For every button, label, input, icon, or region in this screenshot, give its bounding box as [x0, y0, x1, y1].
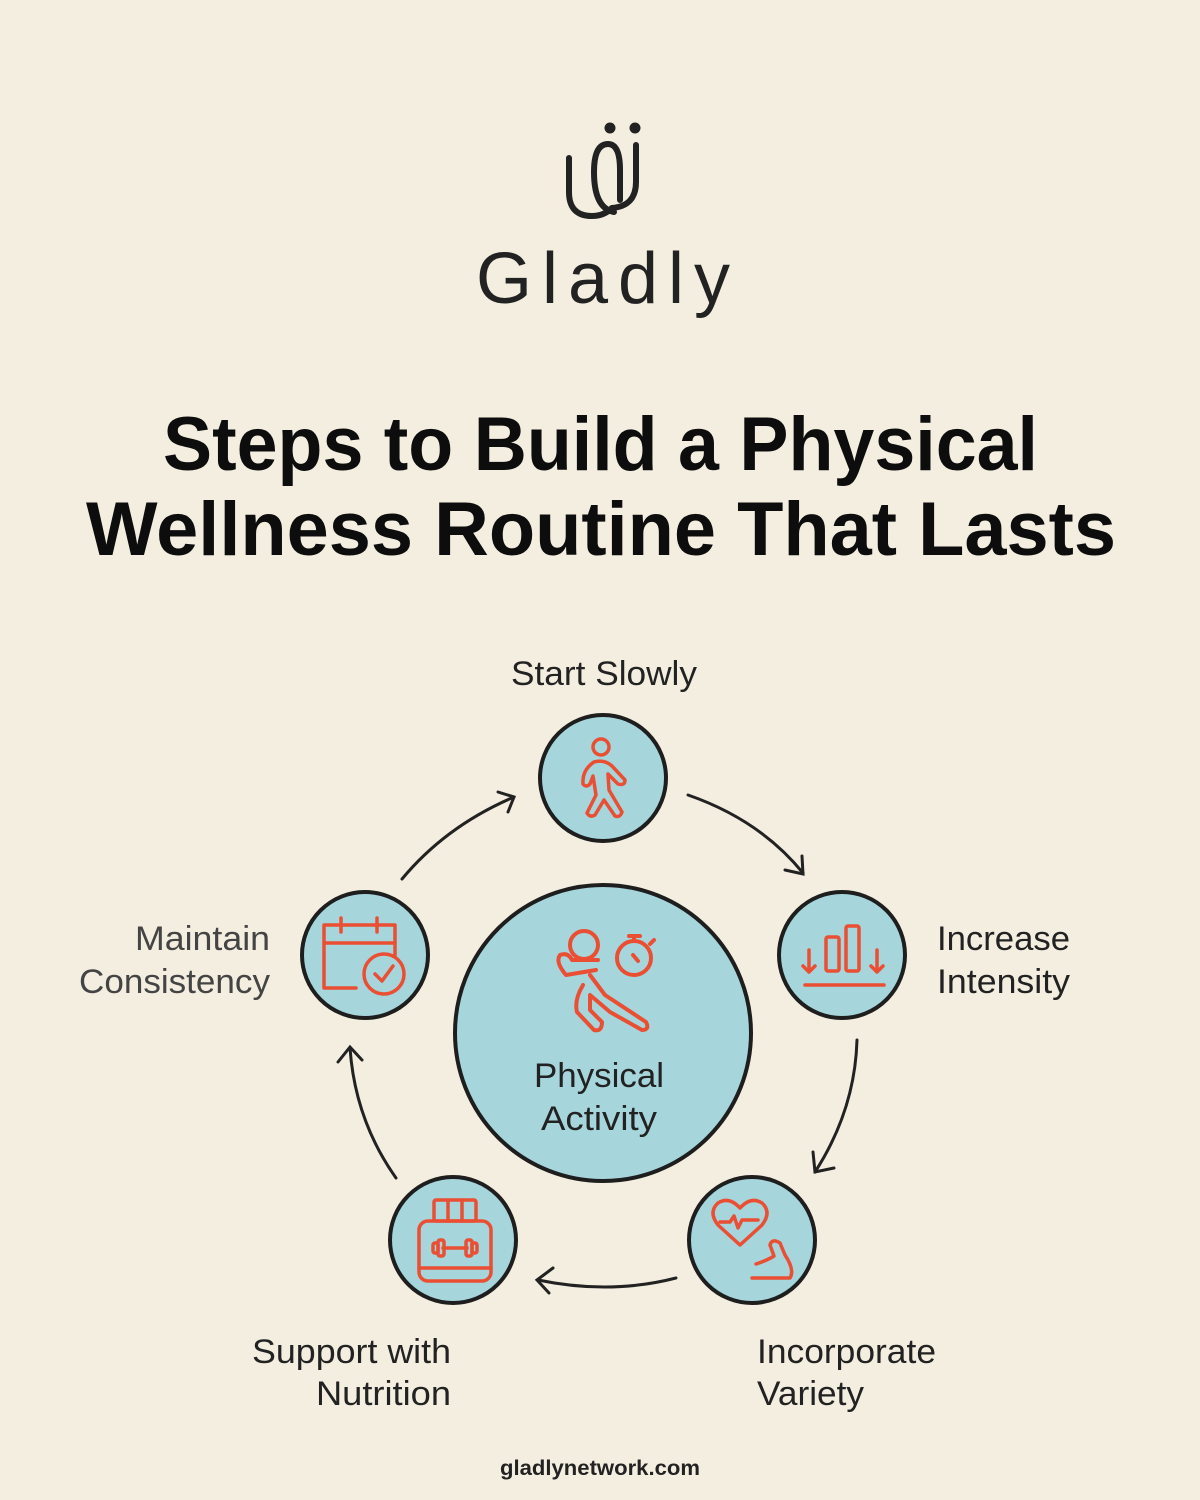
- node: support with nutrition: Nutrition: [316, 1375, 451, 1413]
- icon: runner with stopwatch: [558, 931, 654, 1030]
- logo mark: [569, 126, 638, 216]
- node: increase intensity: Increase: [937, 920, 1070, 958]
- node: maintain consistency: Consistency: [79, 963, 270, 1001]
- center label: Physical: [534, 1057, 664, 1095]
- node: increase intensity: Intensity: [937, 963, 1070, 1001]
- node: support with nutrition: Support with: [252, 1333, 451, 1371]
- node: incorporate variety: [689, 1177, 936, 1413]
- center circle: Activity: [541, 1100, 657, 1138]
- arrows: [338, 792, 857, 1293]
- node: incorporate variety: Incorporate: [757, 1333, 936, 1371]
- title: Wellness Routine That Lasts: [86, 487, 1116, 572]
- node: maintain consistency: Maintain: [135, 920, 270, 958]
- title: [86, 402, 1116, 572]
- footer url: gladlynetwork.com: [500, 1457, 700, 1480]
- node: start slowly: Start Slowly: [511, 655, 697, 693]
- node: incorporate variety: Variety: [757, 1375, 864, 1413]
- title: Steps to Build a Physical: [163, 402, 1038, 487]
- node: increase intensity: [779, 892, 1070, 1018]
- logo wordmark: Gladly: [476, 239, 730, 319]
- node: maintain consistency: [79, 892, 428, 1018]
- node: support with nutrition: [252, 1177, 516, 1413]
- center circle: [455, 885, 751, 1181]
- node: start slowly: [511, 655, 697, 841]
